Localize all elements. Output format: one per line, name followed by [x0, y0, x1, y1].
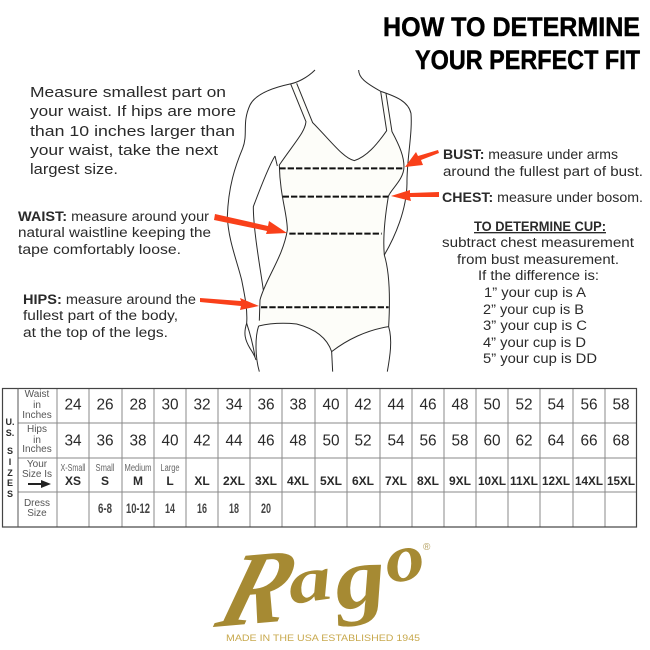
row: size names: 10XL [478, 474, 506, 488]
row headers [22, 389, 52, 519]
row: waist: 28 [129, 396, 147, 414]
row: waist: 30 [161, 396, 179, 414]
row: hips: 68 [612, 432, 630, 450]
row: size names: 3XL [255, 474, 277, 488]
icon: arrow [28, 480, 51, 488]
row: dress size: 20 [261, 501, 271, 516]
row: hips: 58 [451, 432, 469, 450]
row headers: Inches [22, 444, 52, 455]
text block: hips [23, 292, 196, 340]
row: waist: 56 [580, 396, 598, 414]
text block: waist: WAIST: measure around your [18, 209, 210, 224]
row: waist: 58 [612, 396, 630, 414]
row: hips: 48 [289, 432, 307, 450]
row: hips: 66 [580, 432, 598, 450]
row: hips: 56 [419, 432, 437, 450]
row: waist: 32 [193, 396, 211, 414]
row: dress size: 18 [229, 501, 239, 516]
text block: determine cup: 2” your cup is B [483, 302, 584, 317]
row: dress size: 14 [165, 501, 175, 516]
row headers: Size Is [22, 469, 52, 480]
arrow: waist [214, 214, 287, 234]
row: size names: 11XL [510, 474, 538, 488]
row: waist: 34 [225, 396, 243, 414]
row: waist: 26 [96, 396, 114, 414]
side label: US sizes [6, 417, 14, 499]
text block: measuring intro: Measure smallest part on [30, 84, 226, 101]
row: dress size: 16 [197, 501, 207, 516]
text block: determine cup: TO DETERMINE CUP: [474, 219, 606, 234]
row: size names: M [133, 474, 143, 488]
text block: waist: tape comfortably loose. [18, 242, 181, 257]
text block: determine cup: from bust measurement. [457, 252, 619, 267]
row: size names: X-Small [60, 463, 86, 474]
row: hips [64, 432, 630, 450]
text block: hips: fullest part of the body, [23, 308, 178, 323]
row: dress size: 10-12 [126, 501, 150, 516]
text block: hips: HIPS: measure around the [23, 292, 196, 307]
row: hips: 44 [225, 432, 243, 450]
row: dress size [98, 501, 271, 516]
text block: measuring intro [30, 84, 236, 178]
logo: Rago: ® [423, 542, 431, 553]
row: size names: 14XL [575, 474, 603, 488]
row headers: in [33, 400, 41, 411]
side label: US sizes: Z [7, 468, 13, 478]
row: size names: XS [65, 474, 81, 488]
row: size names: 5XL [320, 474, 342, 488]
side label: US sizes: S. [6, 428, 14, 438]
text block: determine cup: If the difference is: [478, 268, 599, 283]
row: waist: 50 [483, 396, 501, 414]
row headers: Your [27, 459, 48, 470]
row: hips: 60 [483, 432, 501, 450]
text block: determine cup: 1” your cup is A [484, 285, 586, 300]
row: size names: 2XL [223, 474, 245, 488]
row: size names: 7XL [385, 474, 407, 488]
text block: determine cup: 3” your cup is C [483, 318, 587, 333]
row: size names: L [166, 474, 174, 488]
logo: Rago: g [325, 527, 392, 629]
arrow: chest [391, 190, 439, 201]
row: hips: 38 [129, 432, 147, 450]
row: waist [64, 396, 630, 414]
logo: Rago: a [283, 542, 336, 618]
text block: determine cup: 4” your cup is D [483, 335, 586, 350]
row: hips: 62 [515, 432, 533, 450]
text block: waist: natural waistline keeping the [18, 225, 211, 240]
row: waist: 52 [515, 396, 533, 414]
side label: US sizes: E [7, 478, 13, 488]
row: hips: 54 [387, 432, 405, 450]
row: hips: 64 [547, 432, 565, 450]
row: size names: Large [160, 463, 180, 474]
row: hips: 46 [257, 432, 275, 450]
row: size names [60, 463, 635, 488]
text block: measuring intro: your waist, take the next [30, 142, 219, 159]
row: size names: 9XL [449, 474, 471, 488]
row headers: Waist [25, 389, 50, 400]
row headers: Inches [22, 410, 52, 421]
text block: hips: at the top of the legs. [23, 325, 168, 340]
arrow: bust [405, 150, 439, 167]
row: waist: 48 [451, 396, 469, 414]
row: size names: S [101, 474, 109, 488]
size chart table [2, 388, 637, 527]
logo: Rago: R [205, 527, 311, 650]
row: hips: 40 [161, 432, 179, 450]
row headers: Hips [27, 424, 47, 435]
row headers: Size [27, 508, 47, 519]
text block: measuring intro: than 10 inches larger than [30, 123, 235, 140]
arrow: hips [200, 298, 259, 310]
row: size names: Medium [124, 463, 152, 474]
side label: US sizes: S [7, 489, 13, 499]
logo: Rago: o [380, 518, 429, 598]
row: size names: Small [96, 463, 114, 474]
body illustration with tape lines [227, 70, 411, 372]
row: waist: 44 [387, 396, 405, 414]
row: hips: 34 [64, 432, 82, 450]
row: waist: 38 [289, 396, 307, 414]
row headers: Dress [24, 498, 50, 509]
row: size names: 8XL [417, 474, 439, 488]
text block: bust: BUST: measure under arms [443, 147, 618, 162]
side label: US sizes: I [9, 457, 11, 467]
row: hips: 42 [193, 432, 211, 450]
row: size names: 12XL [542, 474, 570, 488]
row: waist: 24 [64, 396, 82, 414]
row: dress size: 6-8 [98, 501, 112, 516]
row: waist: 36 [257, 396, 275, 414]
row headers: in [33, 435, 41, 446]
text block: measuring intro: your waist. If hips are more [30, 103, 236, 120]
row: hips: 36 [96, 432, 114, 450]
logo: Rago [205, 518, 431, 650]
row: size names: XL [194, 474, 210, 488]
row: size names: 15XL [607, 474, 635, 488]
row: waist: 46 [419, 396, 437, 414]
text block: determine cup: 5” your cup is DD [483, 351, 597, 366]
row: waist: 54 [547, 396, 565, 414]
row: size names: 6XL [352, 474, 374, 488]
text block: bust [443, 147, 643, 179]
text block: waist [18, 209, 211, 257]
text block: determine cup [442, 219, 634, 366]
text block: chest: CHEST: measure under bosom. [442, 190, 643, 205]
title [383, 12, 640, 75]
row: waist: 42 [354, 396, 372, 414]
logo: Rago: MADE IN THE USA ESTABLISHED 1945 [226, 633, 420, 643]
side label: US sizes: U. [6, 417, 14, 427]
row: hips: 52 [354, 432, 372, 450]
row: waist: 40 [322, 396, 340, 414]
side label: US sizes: S [7, 446, 13, 456]
text block: measuring intro: largest size. [30, 161, 118, 178]
text block: determine cup: subtract chest measurement [442, 235, 634, 250]
row: hips: 50 [322, 432, 340, 450]
row: size names: 4XL [287, 474, 309, 488]
text block: bust: around the fullest part of bust. [443, 164, 643, 179]
